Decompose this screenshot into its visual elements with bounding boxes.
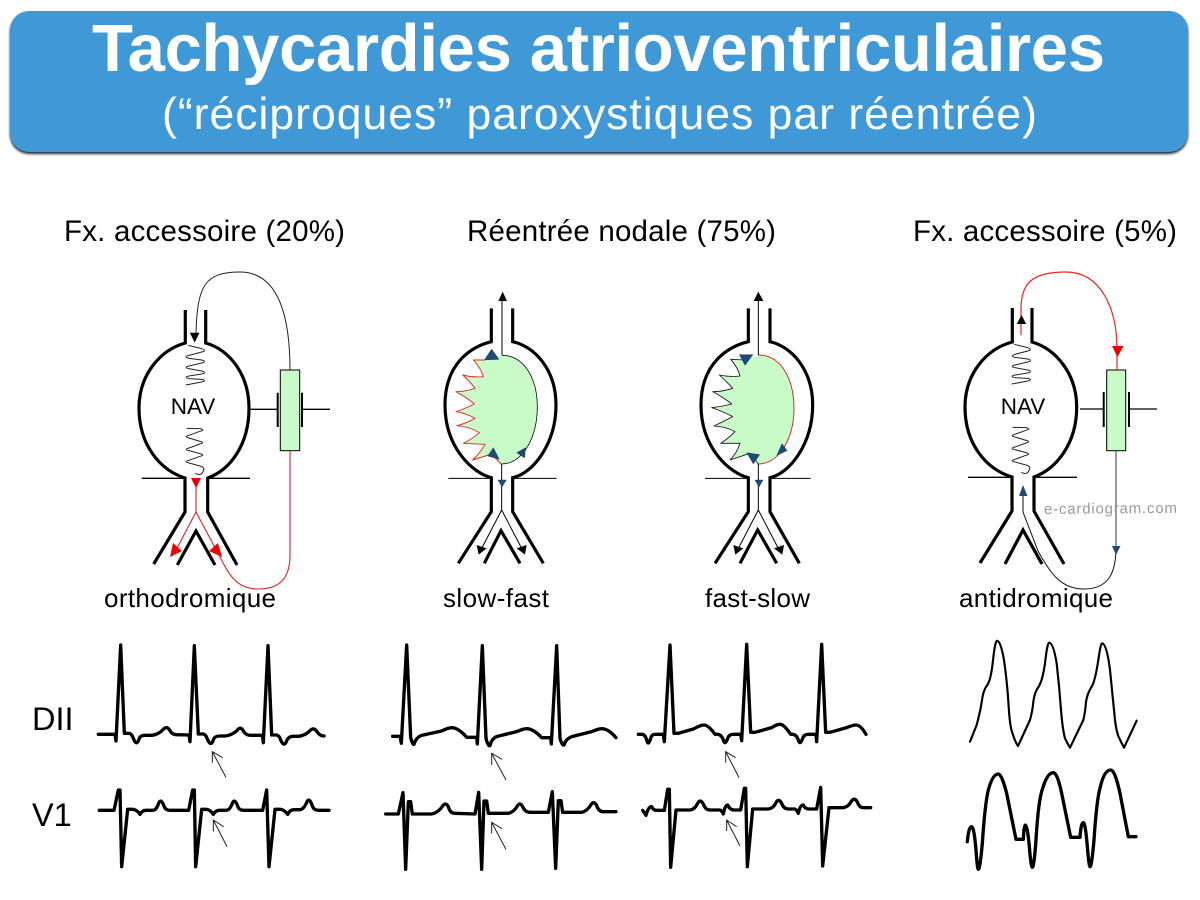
heading: accessory pathway 5%: Fx. accessoire (5%) [913, 215, 1177, 248]
heading: nodal reentry 75%: Réentrée nodale (75%) [467, 215, 776, 248]
label: orthodromique: orthodromique [104, 583, 276, 613]
label: slow-fast: slow-fast [443, 583, 550, 613]
ECG traces: antidromic [967, 641, 1137, 869]
ECG traces: slow-fast [386, 645, 616, 869]
subtitle: (“réciproques” paroxystiques par réentrée) [162, 90, 1037, 139]
watermark: e-cardiogram.com [1044, 500, 1177, 518]
header banner [10, 11, 1188, 154]
lead label: DII: DII [32, 701, 74, 737]
label: NAV: NAV [171, 394, 215, 419]
lead label: V1: V1 [32, 797, 72, 833]
label: antidromique: antidromique [959, 583, 1113, 613]
diagram: fast-slow [701, 292, 813, 563]
diagram: antidromic circuit [965, 272, 1157, 589]
label: fast-slow: fast-slow [705, 583, 810, 613]
label: NAV: NAV [1001, 394, 1045, 419]
heading: accessory pathway 20%: Fx. accessoire (20%) [64, 215, 345, 248]
diagram: orthodromic circuit [139, 272, 330, 589]
ECG traces: orthodromic [98, 645, 329, 867]
ECG traces: fast-slow [638, 644, 871, 867]
diagram: slow-fast [445, 292, 557, 563]
title: Tachycardies atrioventriculaires [92, 11, 1105, 86]
